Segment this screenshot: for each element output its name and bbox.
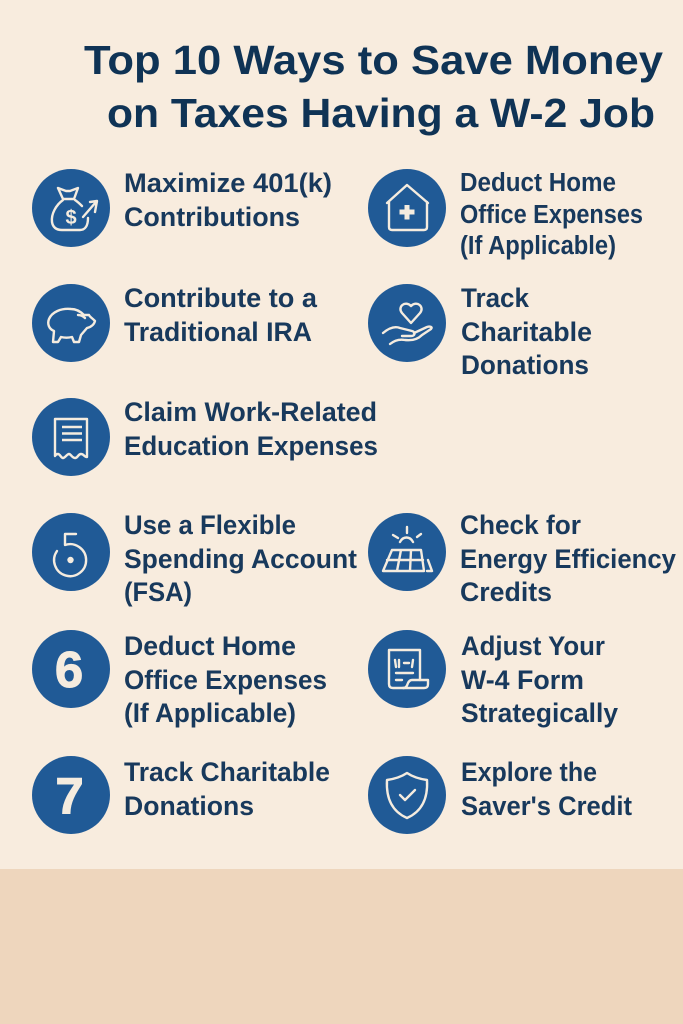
item: Use a Flexible Spending Account (FSA) — [124, 510, 357, 607]
icon: number 7: 7 — [55, 768, 84, 824]
item: Adjust Your W-4 Form Strategically — [461, 631, 618, 728]
item: Track Charitable Donations: Track — [461, 283, 530, 313]
icon: hand holding heart — [368, 284, 446, 362]
bottom band — [0, 869, 683, 1024]
item: Explore the Saver's Credit: Explore the — [461, 757, 597, 787]
item: Use a Flexible Spending Account (FSA): Use a Flexible — [124, 510, 296, 540]
item: Deduct Home Office Expenses (If Applicable): (If Applicable) — [460, 232, 616, 260]
icon: receipt — [32, 398, 110, 476]
title — [84, 37, 663, 136]
item: Track Charitable Donations — [461, 283, 592, 380]
item: Maximize 401(k) Contributions — [124, 168, 332, 232]
icon: number 5 with dot — [32, 513, 110, 591]
icon: number 6 — [32, 630, 110, 708]
item: Track Charitable Donations: Donations — [124, 791, 254, 821]
icon: W-4 form — [368, 630, 446, 708]
icon: solar panel with sun — [368, 513, 446, 591]
item: Deduct Home Office Expenses (If Applicable): Office Expenses — [460, 201, 643, 229]
icon: piggy bank — [32, 284, 110, 362]
item: Contribute to a Traditional IRA — [124, 283, 318, 347]
item: Check for Energy Efficiency Credits: Check for — [460, 510, 581, 540]
item: Track Charitable Donations: Charitable — [461, 317, 592, 347]
item: Check for Energy Efficiency Credits: Energy Efficiency — [460, 544, 676, 574]
item: Check for Energy Efficiency Credits — [460, 510, 676, 607]
item: Claim Work-Related Education Expenses — [124, 397, 378, 461]
item: Explore the Saver's Credit: Saver's Credit — [461, 791, 632, 821]
icon: number 7 — [32, 756, 110, 834]
item: Deduct Home Office Expenses (If Applicable) — [124, 631, 327, 728]
item: Contribute to a Traditional IRA: Traditional IRA — [124, 317, 312, 347]
icon: number 6: 6 — [55, 641, 83, 698]
icon: shield with check — [368, 756, 446, 834]
item: Explore the Saver's Credit — [461, 757, 632, 821]
item: Track Charitable Donations: Donations — [461, 350, 589, 380]
item: Maximize 401(k) Contributions: Maximize 401(k) — [124, 168, 332, 198]
item: Adjust Your W-4 Form Strategically: W-4 Form — [461, 665, 584, 695]
item: Use a Flexible Spending Account (FSA): (FSA) — [124, 577, 192, 607]
item: Check for Energy Efficiency Credits: Credits — [460, 577, 552, 607]
item: Claim Work-Related Education Expenses: Education Expenses — [124, 431, 378, 461]
item: Deduct Home Office Expenses (If Applicable): Office Expenses — [124, 665, 327, 695]
item: Maximize 401(k) Contributions: Contributions — [124, 202, 300, 232]
icon: money bag with arrow — [32, 169, 110, 247]
icon: home with plus — [368, 169, 446, 247]
item: Adjust Your W-4 Form Strategically: Adjust Your — [461, 631, 605, 661]
title: on Taxes Having a W-2 Job — [107, 90, 655, 136]
item: Deduct Home Office Expenses (If Applicable): Deduct Home — [460, 169, 616, 197]
item: Track Charitable Donations: Track Charitable — [124, 757, 330, 787]
title: Top 10 Ways to Save Money — [84, 37, 663, 83]
item: Adjust Your W-4 Form Strategically: Strategically — [461, 698, 618, 728]
item: Deduct Home Office Expenses (If Applicable): Deduct Home — [124, 631, 296, 661]
item: Contribute to a Traditional IRA: Contribute to a — [124, 283, 318, 313]
item: Claim Work-Related Education Expenses: Claim Work-Related — [124, 397, 377, 427]
item: Deduct Home Office Expenses (If Applicable) — [460, 169, 643, 260]
item: Deduct Home Office Expenses (If Applicable): (If Applicable) — [124, 698, 296, 728]
item: Track Charitable Donations — [124, 757, 330, 821]
item: Use a Flexible Spending Account (FSA): Spending Account — [124, 544, 357, 574]
icon: money bag with arrow: $ — [65, 207, 77, 229]
